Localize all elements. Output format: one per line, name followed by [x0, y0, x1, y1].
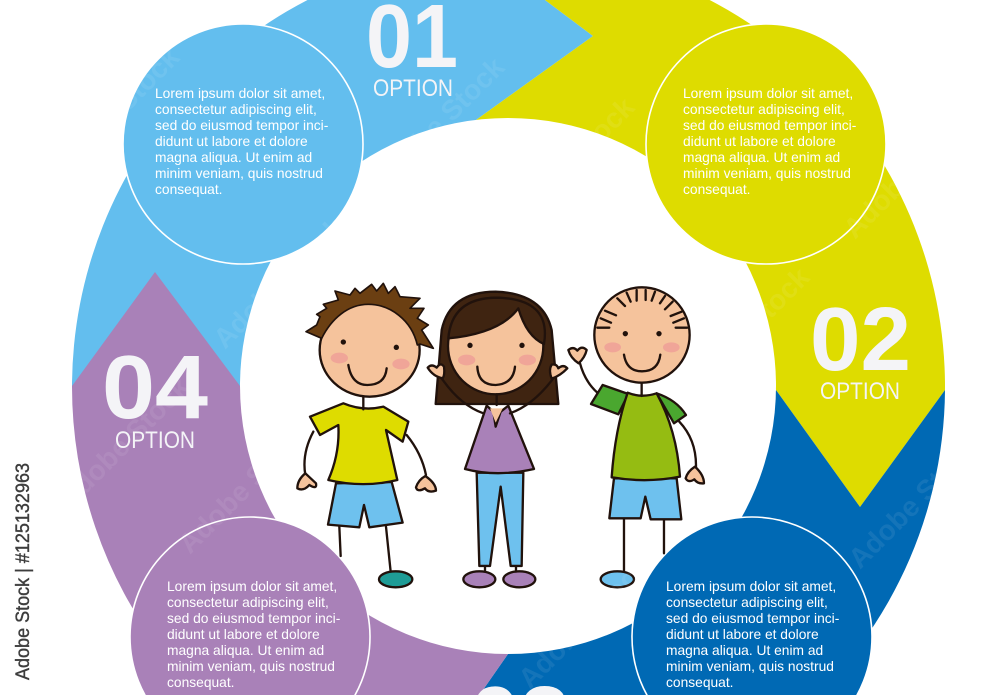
text circle: light blue	[123, 24, 363, 264]
Adobe Stock watermark pattern: Adobe Stock	[837, 101, 981, 244]
text circle: dark blue: consequat.	[666, 675, 734, 690]
text circle: light blue: minim veniam, quis nostrud	[155, 166, 323, 181]
text circle: dark blue: minim veniam, quis nostrud	[666, 659, 834, 674]
Adobe Stock watermark pattern: Adobe Stock	[42, 41, 186, 184]
text circle: purple: minim veniam, quis nostrud	[167, 659, 335, 674]
text circle: purple	[130, 517, 370, 695]
text circle: dark blue: consectetur adipiscing elit,	[666, 595, 828, 610]
Adobe Stock watermark pattern: Adobe Stock	[512, 551, 656, 694]
text circle: light blue: consectetur adipiscing elit,	[155, 102, 317, 117]
Adobe Stock watermark pattern: Adobe Stock	[497, 91, 641, 234]
text circle: dark blue: magna aliqua. Ut enim ad	[666, 643, 823, 658]
text circle: yellow: consequat.	[683, 182, 751, 197]
text circle: yellow: magna aliqua. Ut enim ad	[683, 150, 840, 165]
character: boy with brown hair	[297, 283, 436, 587]
text circle: light blue: magna aliqua. Ut enim ad	[155, 150, 312, 165]
text circle: yellow: sed do eiusmod tempor inci-	[683, 118, 856, 133]
Adobe Stock watermark pattern: Adobe Stock	[207, 211, 351, 354]
number 01 and option label: OPTION	[373, 75, 453, 102]
text circle: light blue: Lorem ipsum dolor sit amet,	[155, 86, 325, 101]
text circle: purple: Lorem ipsum dolor sit amet,	[167, 579, 337, 594]
text circle: light blue: consequat.	[155, 182, 223, 197]
text circle: dark blue: sed do eiusmod tempor inci-	[666, 611, 839, 626]
Adobe Stock watermark pattern: Adobe Stock	[842, 431, 986, 574]
text circle: yellow: minim veniam, quis nostrud	[683, 166, 851, 181]
text circle: purple: consequat.	[167, 675, 235, 690]
number 02 and option label: 02	[810, 290, 911, 390]
text circle: light blue: didunt ut labore et dolore	[155, 134, 308, 149]
character: boy with short hair, waving	[568, 287, 704, 587]
segment: dark blue	[400, 390, 945, 695]
Adobe Stock watermark pattern: Adobe Stock	[367, 51, 511, 194]
Adobe Stock watermark pattern: Adobe Stock	[172, 416, 316, 559]
text circle: purple: magna aliqua. Ut enim ad	[167, 643, 324, 658]
number 04 and option label: OPTION	[115, 427, 195, 454]
text circle: purple: sed do eiusmod tempor inci-	[167, 611, 340, 626]
text circle: purple: didunt ut labore et dolore	[167, 627, 320, 642]
segment: purple	[72, 272, 508, 695]
text circle: yellow	[646, 24, 886, 264]
segment: yellow	[476, 0, 945, 507]
Adobe Stock ID, vertical: Adobe Stock | #125132963	[13, 463, 34, 680]
Adobe Stock watermark pattern: Adobe Stock	[672, 261, 816, 404]
number 04 and option label: 04	[102, 338, 208, 438]
text circle: yellow: consectetur adipiscing elit,	[683, 102, 845, 117]
centre white disc	[240, 118, 776, 654]
text circle: yellow: didunt ut labore et dolore	[683, 134, 836, 149]
text circle: light blue: sed do eiusmod tempor inci-	[155, 118, 328, 133]
text circle: dark blue: Lorem ipsum dolor sit amet,	[666, 579, 836, 594]
Adobe Stock watermark pattern: Adobe Stock	[52, 371, 196, 514]
text circle: purple: consectetur adipiscing elit,	[167, 595, 329, 610]
number 02 and option label: OPTION	[820, 378, 900, 405]
character: girl with long dark hair	[428, 292, 567, 587]
text circle: dark blue	[632, 517, 872, 695]
text circle: yellow: Lorem ipsum dolor sit amet,	[683, 86, 853, 101]
text circle: dark blue: didunt ut labore et dolore	[666, 627, 819, 642]
segment: light blue	[72, 0, 593, 386]
